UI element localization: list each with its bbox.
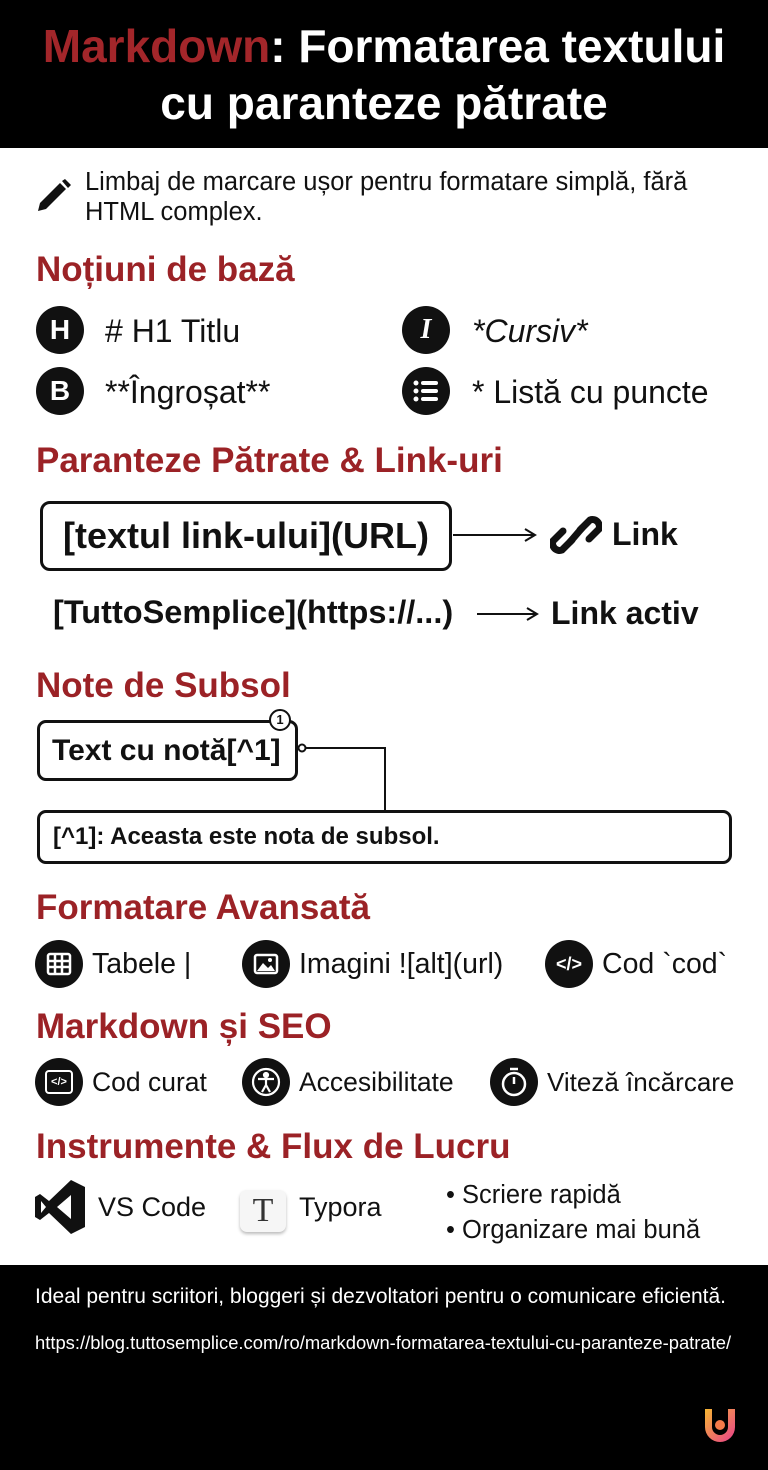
label: Link: Link — [612, 516, 678, 552]
arrow — [453, 528, 537, 542]
heading: Note de Subsol: Note de Subsol — [36, 666, 291, 705]
footnote diagram: Text cu notă[^1] — [52, 734, 281, 767]
arrow — [477, 607, 539, 621]
icon: Typora — [240, 1190, 286, 1232]
footnote diagram: 1 — [276, 712, 284, 727]
panel: basics: *Cursiv* — [472, 313, 588, 349]
header — [0, 0, 768, 148]
example link row — [53, 594, 699, 631]
footer: Ideal pentru scriitori, bloggeri și dezvoltatori pentru o comunicare eficientă. — [35, 1285, 726, 1308]
heading: Noțiuni de bază: Noțiuni de bază — [36, 250, 295, 289]
panel: advanced: Tabele | — [92, 948, 191, 980]
footer: https://blog.tuttosemplice.com/ro/markdown-formatarea-textului-cu-paranteze-patrate/ — [35, 1332, 731, 1353]
icon: pencil — [38, 179, 71, 211]
panel: SEO: Accesibilitate — [299, 1067, 454, 1097]
intro text with pencil icon: Limbaj de marcare ușor pentru formatare simplă, fără HTML complex. — [85, 168, 687, 226]
heading: Formatare Avansată: Formatare Avansată — [36, 888, 370, 927]
footnote diagram: [^1]: Aceasta este nota de subsol. — [53, 823, 440, 850]
panel: SEO: Cod curat — [92, 1067, 207, 1097]
link syntax box: [textul link-ului](URL) — [63, 515, 429, 556]
title: Markdown: Formatarea textului — [43, 20, 725, 72]
panel: tools: • Organizare mai bună — [446, 1216, 700, 1244]
logo — [705, 1409, 735, 1442]
panel: basics: * Listă cu puncte — [472, 374, 709, 410]
panel: SEO — [35, 1058, 734, 1106]
panel: basics: # H1 Titlu — [105, 313, 240, 349]
icon: link — [550, 516, 602, 554]
icon: Typora: T — [253, 1192, 273, 1229]
panel: tools — [35, 1180, 700, 1244]
panel: advanced — [35, 940, 727, 988]
panel: basics: I — [421, 314, 431, 345]
panel: basics: H — [50, 314, 70, 345]
panel: tools: VS Code — [98, 1192, 206, 1222]
panel: basics: B — [50, 375, 70, 406]
title — [43, 20, 725, 129]
panel: advanced: Imagini ![alt](url) — [299, 948, 503, 980]
example link row: Link activ — [551, 595, 699, 631]
icon: VS Code — [35, 1180, 85, 1234]
footer — [0, 1265, 768, 1470]
heading: Paranteze Pătrate: Paranteze Pătrate & Link-uri — [36, 441, 503, 480]
title: cu paranteze pătrate — [160, 77, 608, 129]
link syntax box — [40, 501, 452, 571]
panel: tools: Typora — [299, 1192, 382, 1222]
panel: SEO: </> — [51, 1076, 67, 1088]
heading: Markdown și SEO: Markdown și SEO — [36, 1007, 332, 1046]
heading: Instrumente: Instrumente & Flux de Lucru — [36, 1127, 510, 1166]
panel: basics: **Îngroșat** — [105, 374, 270, 410]
panel: basics — [36, 306, 709, 415]
footnote diagram — [37, 709, 732, 864]
panel: advanced: Cod `cod` — [602, 948, 727, 980]
example link row: [TuttoSemplice](https://...) — [53, 594, 453, 630]
panel: tools: • Scriere rapidă — [446, 1181, 621, 1209]
panel: advanced: </> — [556, 954, 582, 974]
panel: SEO: Viteză încărcare — [547, 1067, 734, 1097]
